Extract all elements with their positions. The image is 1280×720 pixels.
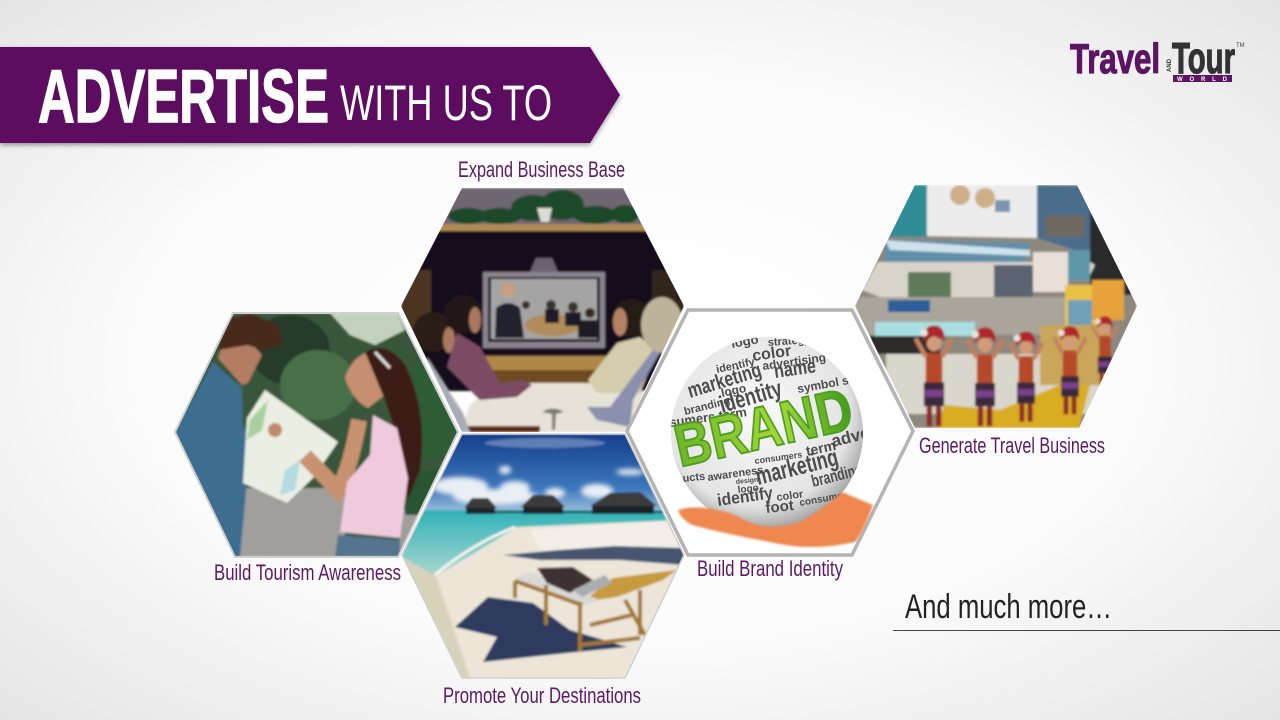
- icon: brand word sphere: identify: [716, 483, 775, 510]
- photo hexagon: beach resort: [402, 434, 684, 678]
- huts: [464, 492, 657, 508]
- person: man right: [588, 337, 657, 393]
- icon: brand word sphere: symbol strategy: [796, 366, 889, 396]
- logo: Travel and Tour World: Travel: [1070, 35, 1160, 82]
- icon: brand word sphere: advert: [829, 420, 884, 451]
- logo: Travel and Tour World: Tour: [1172, 34, 1235, 83]
- brand word: BRAND: [668, 375, 859, 480]
- person: man left back: [447, 333, 532, 400]
- logo: Travel and Tour World: WORLD: [1177, 77, 1228, 83]
- icon: brand word sphere: design: [735, 477, 759, 486]
- heading: ADVERTISE: ADVERTISE: [38, 54, 329, 138]
- shadow of palm: [503, 546, 684, 565]
- icon: brand word sphere: branding: [683, 395, 731, 418]
- icon: open hand: [678, 492, 873, 547]
- icon: brand word sphere: color: [751, 343, 792, 365]
- icon: brand word sphere: term: [804, 437, 837, 459]
- icon: brand word sphere: marketing: [685, 359, 764, 403]
- photo hexagon: video conference room: [401, 188, 684, 432]
- callout: and much more: And much more…: [905, 588, 1112, 626]
- label: build tourism awareness: Build Tourism Awareness: [214, 560, 401, 585]
- heading: WITH US TO: WITH US TO: [340, 75, 552, 131]
- person: man left front: [427, 357, 470, 432]
- label: generate travel business: Generate Travel Business: [919, 433, 1105, 458]
- logo: Travel and Tour World: [1070, 34, 1245, 83]
- woman: [345, 350, 385, 408]
- icon: brand word sphere: consumers: [754, 449, 803, 466]
- shadow of chair: [455, 597, 627, 662]
- photo hexagon: generate travel business: [855, 185, 1137, 428]
- icon: brand word sphere: color: [776, 488, 805, 504]
- icon: brand word sphere: logo: [720, 381, 747, 400]
- icon: brand word sphere: awareness: [707, 464, 764, 484]
- label: build brand identity: Build Brand Identity: [697, 556, 843, 581]
- icon: brand word sphere: foot: [765, 497, 795, 517]
- label: promote your destinations: Promote Your Destinations: [443, 683, 641, 708]
- lounge chair: [582, 570, 677, 602]
- icon: brand word sphere: consumers: [799, 489, 853, 509]
- label: expand business base: Expand Business Base: [458, 157, 625, 182]
- brand hexagon: [627, 310, 913, 555]
- icon: brand word sphere: identify: [715, 356, 757, 376]
- ivy on shelf: [448, 190, 639, 224]
- table: [464, 381, 645, 432]
- icon: brand word sphere: sumers term: [668, 404, 748, 430]
- icon: brand word sphere: logo: [737, 483, 759, 496]
- monitor: [530, 258, 558, 272]
- icon: brand word sphere: marketing: [753, 443, 841, 491]
- person: woman right: [587, 347, 663, 427]
- icon: brand word sphere: [671, 337, 863, 528]
- icon: brand word sphere: logo: [730, 331, 760, 351]
- heading banner: [0, 47, 620, 143]
- map: [243, 390, 338, 503]
- icon: brand word sphere: identity: [716, 375, 786, 419]
- icon: brand word sphere: advertising: [761, 350, 827, 373]
- logo: Travel and Tour World: TM: [1236, 43, 1245, 49]
- wood credenza: [478, 356, 640, 370]
- icon: brand word sphere: branding: [809, 460, 864, 491]
- logo: Travel and Tour World: AND: [1167, 58, 1173, 72]
- photo hexagon: couple reading a map: [175, 313, 460, 557]
- icon: brand word sphere: name: [773, 355, 817, 383]
- icon: brand word sphere: ucts: [682, 471, 706, 485]
- icon: brand word sphere: strategy: [767, 334, 812, 349]
- man: [176, 361, 248, 556]
